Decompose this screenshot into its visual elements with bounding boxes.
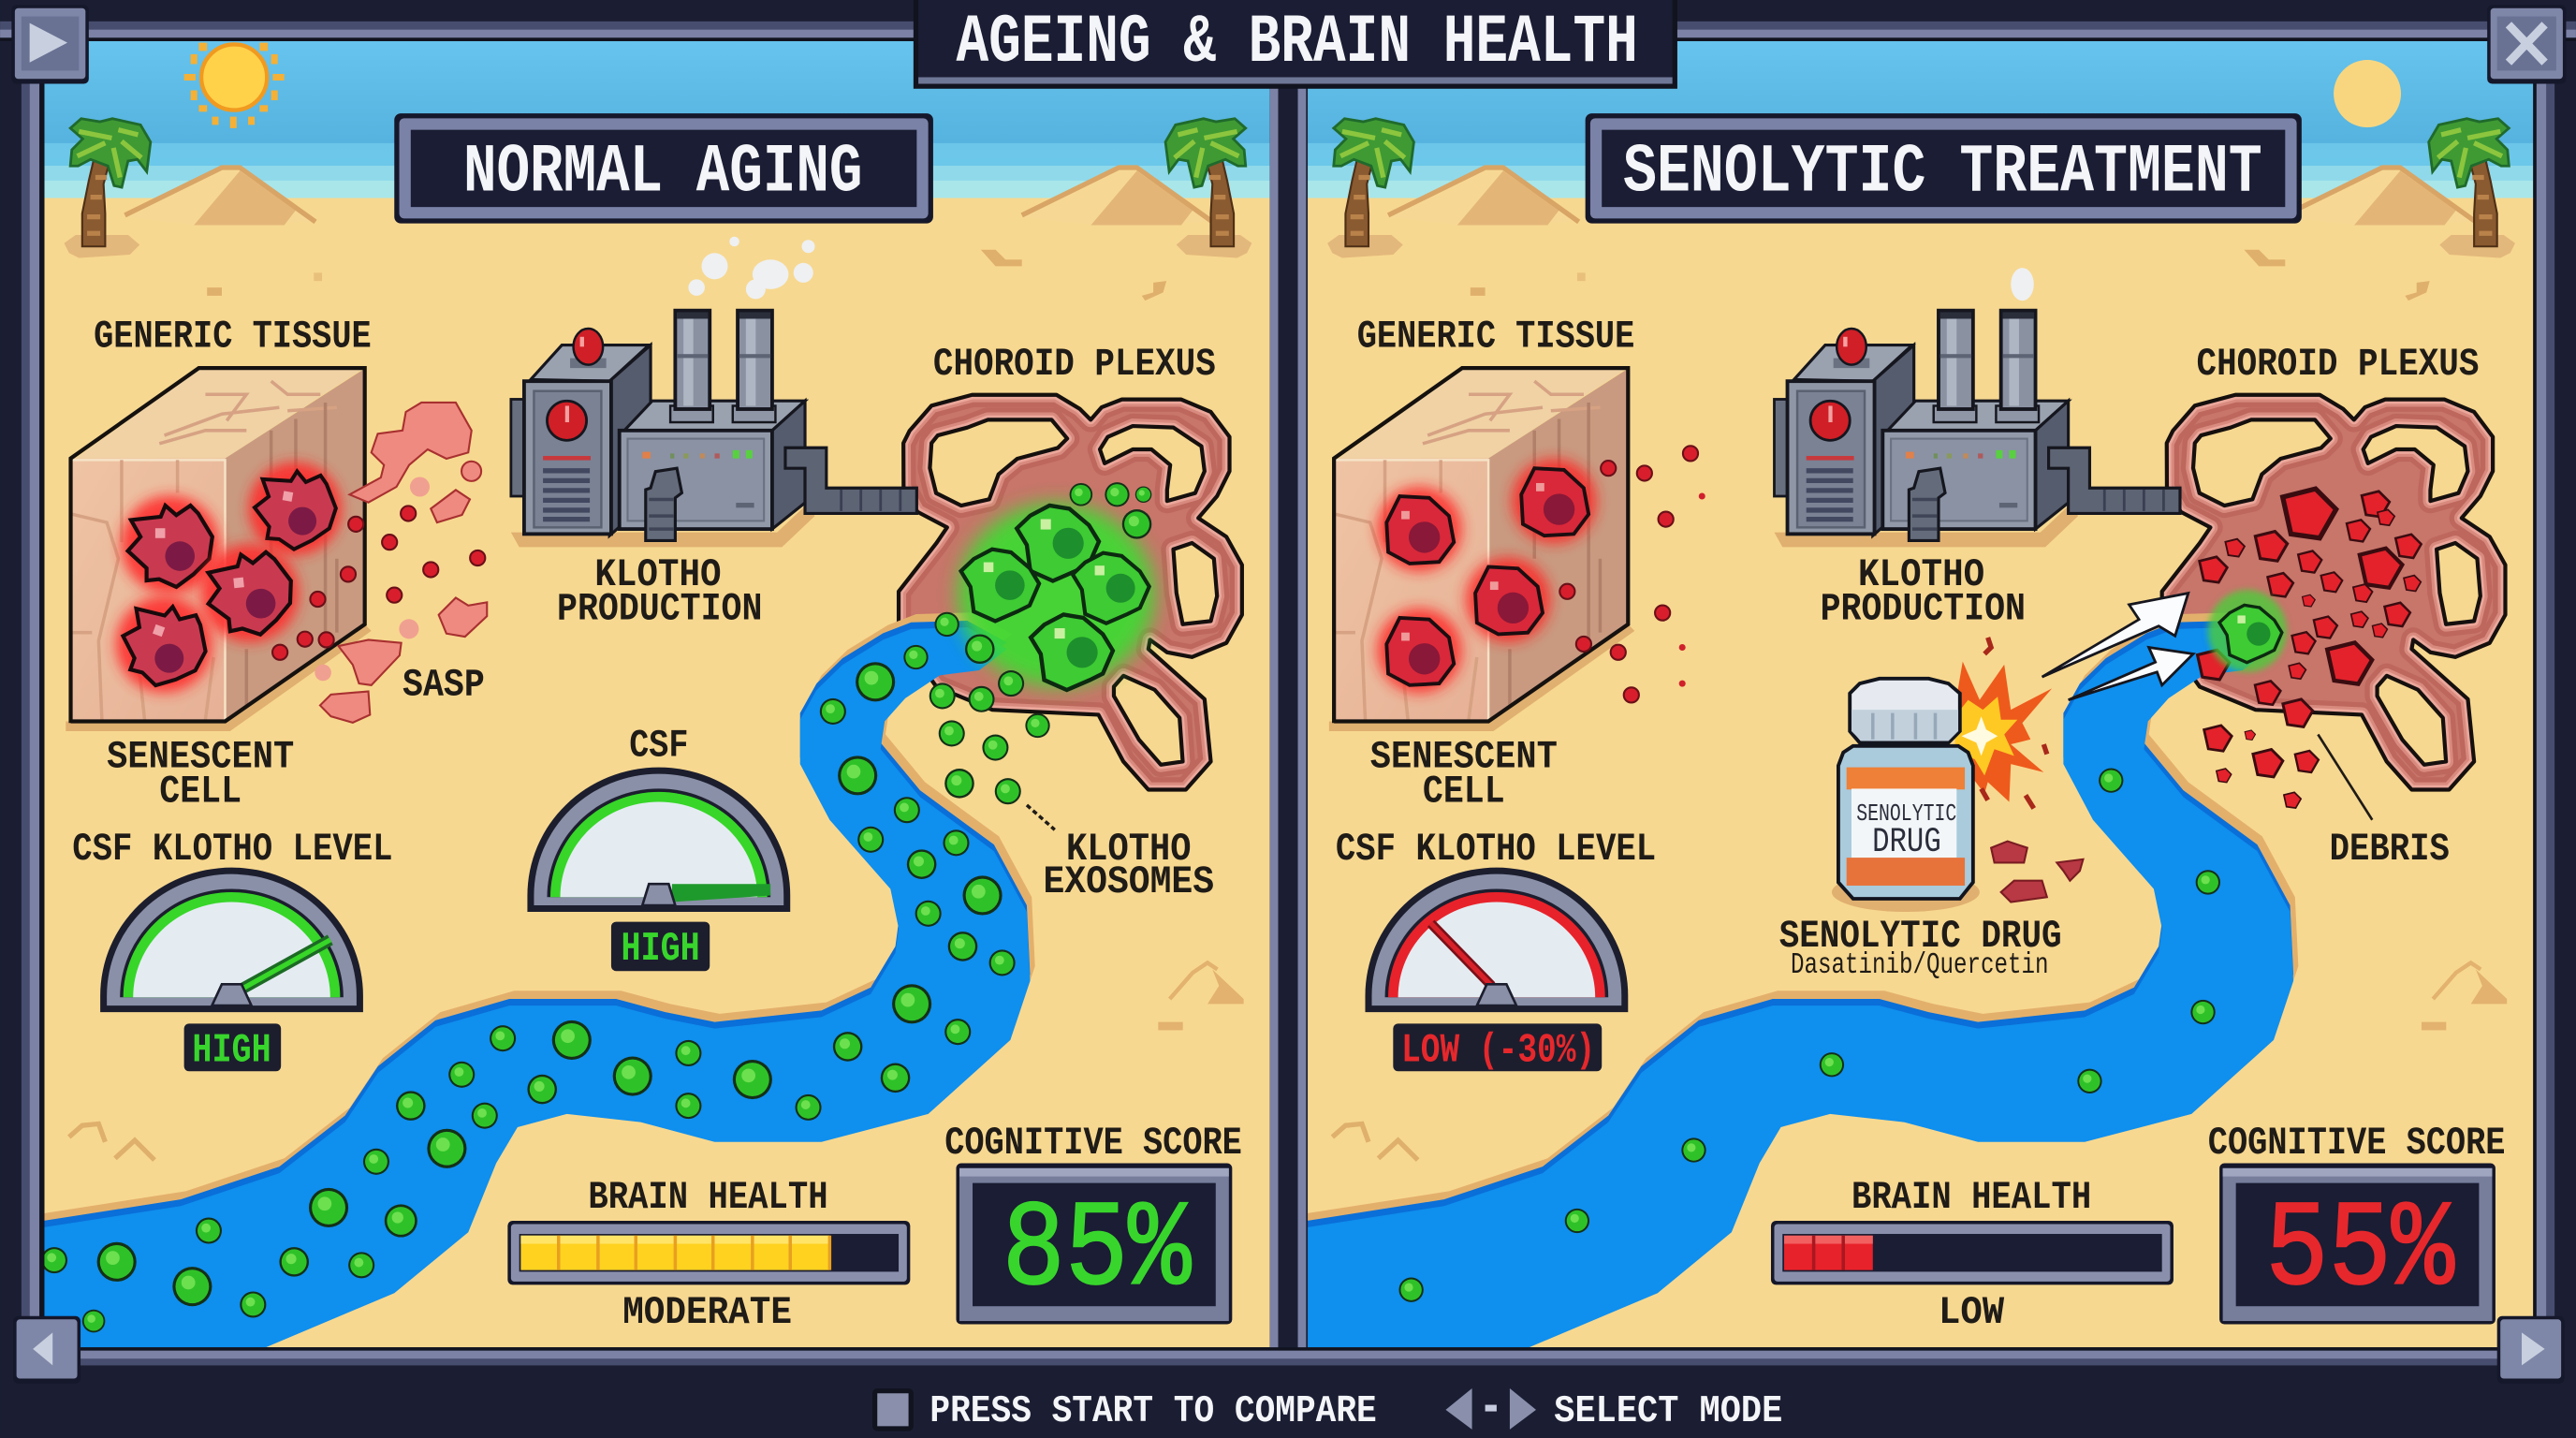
panel: normal aging: [33, 41, 1270, 1364]
pointer line: debris: [2318, 734, 2372, 820]
few exosomes in river: [1398, 768, 2220, 1302]
choroid plexus organ: [897, 393, 1244, 792]
red debris near tissue: [1559, 446, 1705, 702]
label: klotho production: [557, 552, 762, 632]
label: generic tissue: GENERIC TISSUE: [94, 314, 372, 359]
senolytic drug bottle: [1832, 679, 1980, 912]
heading: senolytic treatment: SENOLYTIC TREATMENT: [1623, 135, 2262, 213]
palm trees: [65, 119, 1251, 258]
button: left arrow: [13, 1316, 80, 1384]
heading: normal aging: [394, 113, 933, 224]
klotho factory: [511, 311, 916, 547]
label: klotho production: PRODUCTION: [557, 587, 762, 632]
button: close: [2487, 5, 2566, 84]
klotho exosomes in river: [41, 482, 1151, 1332]
label: klotho production: [1821, 552, 2026, 632]
chip: low -30%: LOW (-30%): [1401, 1028, 1595, 1075]
label: klotho production: PRODUCTION: [1821, 587, 2026, 632]
choroid plexus organ: [2160, 393, 2508, 792]
label: klotho production: KLOTHO: [1858, 552, 1984, 597]
pointer line: klotho exosomes: [1027, 805, 1055, 829]
label on bottle: [1856, 800, 1956, 862]
dunes: [124, 166, 1212, 225]
label: generic tissue: GENERIC TISSUE: [1357, 314, 1634, 359]
gauge: CSF klotho level low: [1365, 868, 1628, 1012]
panel: senolytic treatment: [1296, 41, 2533, 1364]
debris fragments: [2198, 489, 2422, 808]
SASP particles: [272, 403, 487, 723]
label: brain health: BRAIN HEALTH: [588, 1175, 828, 1220]
label: choroid plexus: CHOROID PLEXUS: [2197, 342, 2479, 387]
sun with rays: [184, 43, 285, 128]
dunes: [1388, 166, 2476, 225]
tissue cube with senescent cells: [66, 368, 372, 731]
score box: 85%: [956, 1164, 1232, 1325]
sand ground: [44, 198, 1270, 1348]
palm trees: [1327, 119, 2515, 258]
label: cognitive score: COGNITIVE SCORE: [944, 1121, 1242, 1166]
label: klotho production: KLOTHO: [594, 552, 722, 597]
explosion: [1955, 638, 2052, 808]
smoke puffs: [688, 237, 815, 299]
footer text: press start: PRESS START TO COMPARE: [929, 1390, 1377, 1433]
progress bar: low: [1771, 1221, 2174, 1284]
label: cognitive score: COGNITIVE SCORE: [2208, 1121, 2505, 1166]
label: moderate: MODERATE: [622, 1290, 792, 1335]
label: senescent cell: CELL: [159, 769, 242, 814]
sky: [44, 41, 1270, 198]
label: senescent cell: CELL: [1423, 769, 1505, 814]
label: senescent cell: [1370, 735, 1558, 814]
title plate: AGEING & BRAIN HEALTH: [956, 5, 1638, 82]
sand flecks: [1332, 250, 2507, 1160]
icon: start button: [872, 1388, 914, 1431]
score box: 85%: 85%: [1003, 1182, 1192, 1320]
smoke puff: [2011, 268, 2034, 301]
label: senolytic drug: Dasatinib/Quercetin: [1791, 949, 2049, 982]
label: low: LOW: [1939, 1290, 2005, 1335]
label: CSF klotho level: CSF KLOTHO LEVEL: [1336, 827, 1656, 872]
sand flecks: [69, 250, 1244, 1160]
label: senescent cell: [107, 735, 294, 814]
label on bottle: DRUG: [1872, 823, 1941, 862]
label: senolytic drug: SENOLYTIC DRUG: [1779, 914, 2062, 959]
surviving green cell: [2208, 590, 2287, 672]
label: SASP: SASP: [402, 662, 485, 707]
score box: 55%: [2219, 1164, 2496, 1325]
sky: [1306, 41, 2533, 198]
debris by bottle: [1991, 842, 2083, 902]
tissue cube with damaged cells: [1329, 368, 1634, 731]
chip: klotho high: HIGH: [192, 1028, 271, 1075]
score box: 55%: 55%: [2265, 1182, 2454, 1320]
CSF river: [33, 612, 1035, 1364]
progress bar: moderate: [507, 1221, 910, 1284]
label: klotho exosomes: [1044, 827, 1214, 904]
white arrows: [2042, 594, 2193, 700]
klotho factory: [1774, 311, 2180, 547]
CSF river: [1296, 612, 2298, 1364]
heading: normal aging: NORMAL AGING: [463, 135, 862, 213]
gauge: CSF klotho level: [100, 868, 363, 1012]
heading: senolytic treatment: [1586, 113, 2302, 224]
label: CSF klotho level: CSF KLOTHO LEVEL: [72, 827, 393, 872]
label: klotho exosomes: KLOTHO: [1066, 827, 1191, 872]
label: debris: DEBRIS: [2330, 827, 2450, 872]
chip: CSF high: HIGH: [621, 926, 700, 973]
label: senescent cell: SENESCENT: [107, 735, 294, 780]
label: senescent cell: SENESCENT: [1370, 735, 1558, 780]
klotho producing green cells: [958, 503, 1155, 690]
label: senolytic drug: [1779, 914, 2062, 982]
footer text: select mode: SELECT MODE: [1554, 1390, 1782, 1433]
label on bottle: SENOLYTIC: [1856, 800, 1956, 828]
label: CSF: CSF: [629, 723, 688, 768]
gauge: CSF: [527, 768, 790, 912]
pale sun: [2334, 60, 2401, 127]
icons: left and right arrows: [1445, 1388, 1536, 1430]
button: right arrow: [2497, 1316, 2565, 1384]
sand ground: [1306, 198, 2533, 1348]
button: play: [11, 5, 89, 84]
label: klotho exosomes: EXOSOMES: [1044, 859, 1214, 904]
label: choroid plexus: CHOROID PLEXUS: [933, 342, 1216, 387]
label: brain health: BRAIN HEALTH: [1852, 1175, 2091, 1220]
